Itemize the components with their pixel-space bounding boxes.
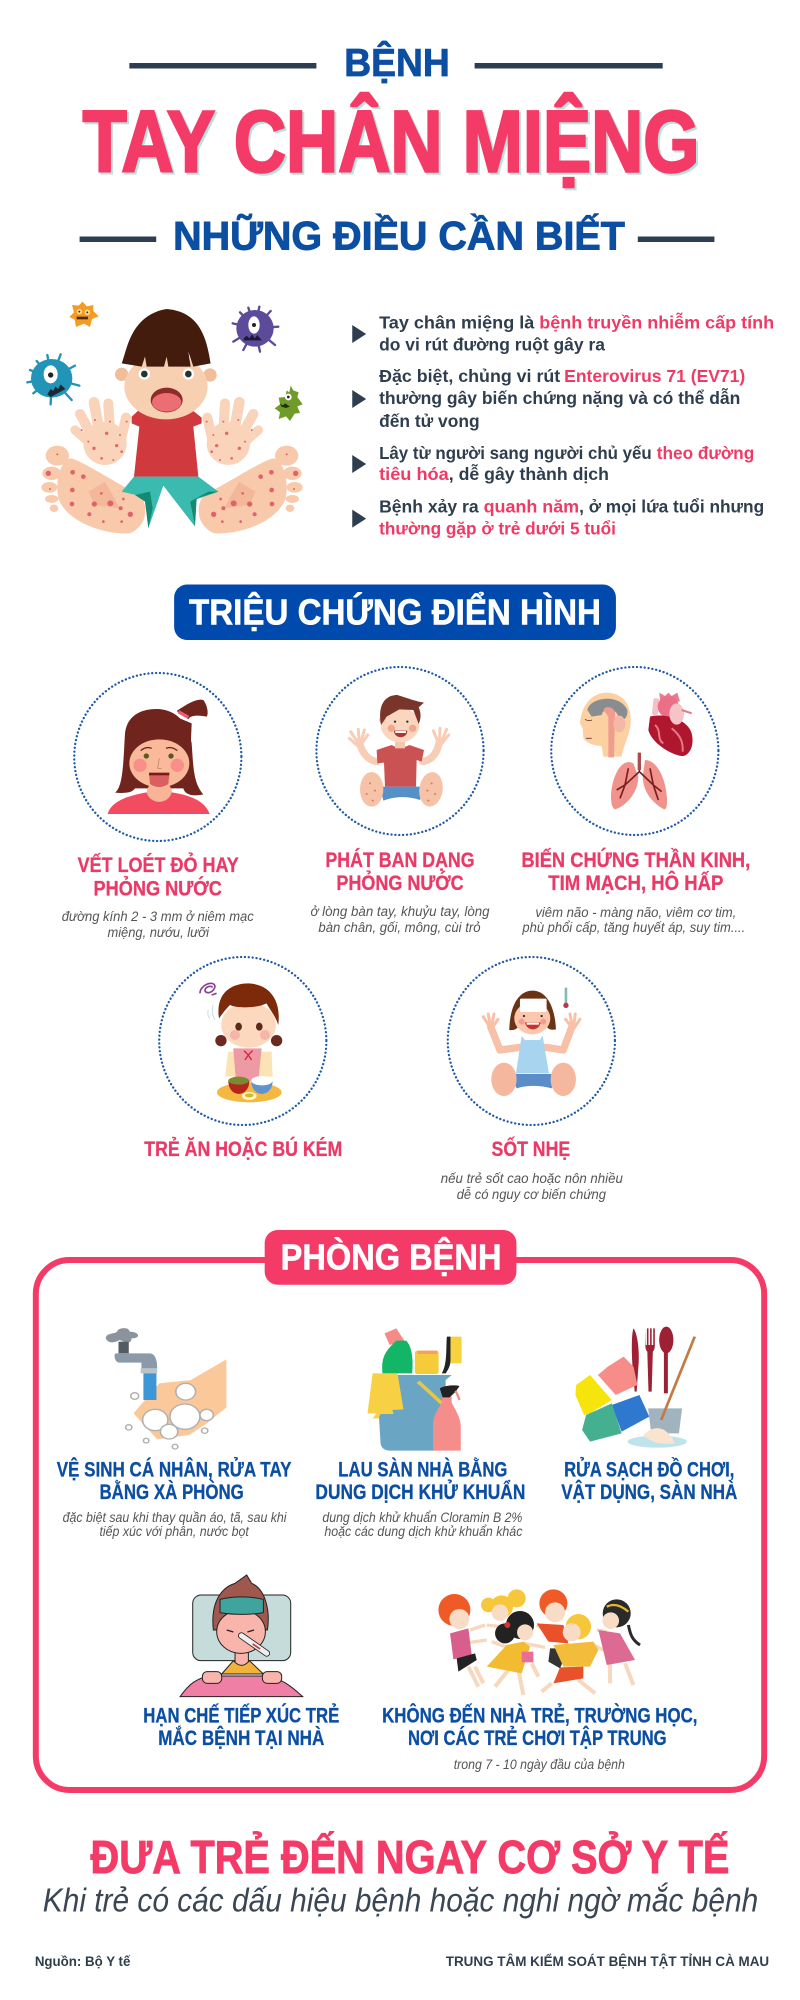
bullet 1 — [352, 312, 774, 355]
heading: BỆNH — [129, 41, 663, 85]
symptom note: nếu trẻ sốt cao hoặc nôn nhiều — [441, 1170, 623, 1186]
item title: KHÔNG ĐẾN NHÀ TRẺ, TRƯỜNG HỌC, — [382, 1703, 698, 1728]
symptom title: TIM MẠCH, HÔ HẤP — [548, 871, 723, 895]
publisher: TRUNG TÂM KIỂM SOÁT BỆNH TẬT TỈNH CÀ MAU — [446, 1952, 769, 1969]
symptom note: viêm não - màng não, viêm cơ tim, — [535, 904, 736, 920]
dotted circle — [159, 957, 326, 1125]
subtitle: NHỮNG ĐIỀU CẦN BIẾT — [80, 212, 714, 259]
icon: blue virus — [27, 354, 79, 404]
heading: BỆNH: BỆNH — [344, 41, 450, 85]
item title: NƠI CÁC TRẺ CHƠI TẬP TRUNG — [408, 1726, 667, 1750]
bullet 2: Enterovirus 71 (EV71) — [564, 366, 745, 386]
icon: orange virus — [69, 302, 99, 327]
bullet 4: quanh năm — [484, 496, 579, 517]
symptom note — [310, 903, 490, 935]
dotted circle — [74, 673, 241, 841]
item: avoid crowded child spaces — [382, 1589, 698, 1772]
bullet 3: tiêu hóa — [379, 464, 450, 484]
symptom: poor appetite — [144, 957, 342, 1161]
item title: MẮC BỆNH TẠI NHÀ — [158, 1726, 324, 1750]
item title: HẠN CHẾ TIẾP XÚC TRẺ — [143, 1703, 339, 1728]
item title: BẰNG XÀ PHÒNG — [100, 1480, 244, 1504]
item title — [561, 1458, 737, 1504]
icon: faucet and soapy hands — [106, 1328, 226, 1449]
icon: girl with food — [200, 983, 282, 1102]
shorts — [122, 477, 218, 528]
item note: trong 7 - 10 ngày đầu của bệnh — [454, 1756, 625, 1772]
item title: DUNG DỊCH KHỬ KHUẨN — [315, 1480, 525, 1504]
illustration: sick child with viruses — [27, 302, 303, 533]
symptom title: PHỎNG NƯỚC — [336, 871, 464, 895]
symptom title — [521, 848, 750, 895]
symptom: complications — [521, 667, 750, 935]
bullet 2: đến tử vong — [379, 411, 480, 431]
heading: PHÒNG BỆNH: PHÒNG BỆNH — [281, 1237, 501, 1278]
item: hand washing — [57, 1328, 292, 1539]
bullet 2 — [352, 366, 745, 431]
symptom title: SỐT NHẸ — [492, 1137, 570, 1161]
icon: heart — [648, 693, 693, 756]
bullet 4: , ở mọi lứa tuổi nhưng — [579, 496, 764, 517]
item note: dung dịch khử khuẩn Cloramin B 2% — [322, 1509, 522, 1525]
bullet 4: thường gặp ở trẻ dưới 5 tuổi — [379, 519, 616, 539]
item title: RỬA SẠCH ĐỒ CHƠI, — [564, 1458, 734, 1482]
feet with rash — [41, 446, 303, 533]
item title: VỆ SINH CÁ NHÂN, RỬA TAY — [57, 1458, 292, 1482]
symptom note — [441, 1170, 623, 1202]
item: cleaning toys and floors — [561, 1327, 737, 1504]
dotted circle — [316, 667, 484, 835]
symptom title — [78, 853, 239, 900]
symptom title — [325, 849, 475, 895]
item title: LAU SÀN NHÀ BẰNG — [338, 1458, 507, 1482]
icon: sick child in bed — [180, 1575, 303, 1697]
item title — [315, 1458, 525, 1504]
item title — [143, 1703, 339, 1750]
item title — [57, 1458, 292, 1504]
bullet 3: , dễ gây thành dịch — [449, 463, 609, 484]
icon: head and brain — [580, 693, 631, 757]
item note: tiếp xúc với phân, nước bọt — [100, 1523, 250, 1539]
hands with rash — [75, 402, 258, 462]
symptom note: bàn chân, gối, mông, cùi trỏ — [318, 919, 481, 935]
source: Nguồn: Bộ Y tế — [35, 1953, 131, 1969]
symptom title: PHÁT BAN DẠNG — [325, 849, 475, 872]
bullet 4: Bệnh xảy ra — [379, 496, 480, 517]
icon: child with fever — [483, 987, 580, 1096]
symptom note — [521, 904, 745, 935]
item note — [63, 1509, 287, 1539]
symptom: blister rash — [310, 667, 490, 935]
heading: PHÒNG BỆNH — [265, 1230, 516, 1285]
bullet 1: Tay chân miệng là — [379, 313, 535, 333]
list: disease facts — [352, 312, 774, 539]
symptom note: ở lòng bàn tay, khuỷu tay, lòng — [310, 903, 490, 919]
panel frame — [36, 1260, 764, 1790]
title: TAY CHÂN MIỆNG: TAY CHÂN MIỆNG — [83, 93, 700, 191]
bullet 2: thường gây biến chứng nặng và có thể dẫn — [379, 387, 740, 408]
icon: girl with ulcer — [108, 700, 210, 814]
item title — [382, 1703, 698, 1750]
bullet 4 — [352, 496, 764, 539]
symptom: mild fever — [441, 957, 623, 1202]
item note: hoặc các dung dịch khử khuẩn khác — [324, 1523, 522, 1539]
item note: đặc biệt sau khi thay quần áo, tã, sau khi — [63, 1509, 287, 1525]
icon: children playing in a circle — [438, 1589, 640, 1695]
bullet 2: Đặc biệt, chủng vi rút — [379, 366, 560, 386]
symptom title: VẾT LOÉT ĐỎ HAY — [78, 853, 239, 877]
head — [115, 309, 217, 419]
icon: purple virus — [233, 307, 278, 352]
symptom note: đường kính 2 - 3 mm ở niêm mạc — [62, 908, 254, 924]
subtitle: NHỮNG ĐIỀU CẦN BIẾT: NHỮNG ĐIỀU CẦN BIẾT — [173, 212, 625, 259]
icon: bucket and cleaning supplies — [367, 1328, 462, 1451]
icons: head, heart and lungs — [580, 693, 693, 809]
item note — [322, 1509, 522, 1539]
panel: prevention — [36, 1230, 764, 1790]
bullet 3: Lây từ người sang người chủ yếu — [379, 443, 652, 463]
icon: boy with rash — [349, 695, 449, 808]
symptom note: miệng, nướu, lưỡi — [107, 924, 210, 940]
icon: lungs — [611, 753, 667, 809]
symptom title: BIẾN CHỨNG THẦN KINH, — [521, 848, 750, 872]
bullet 3 — [352, 443, 754, 484]
dotted circle — [448, 957, 615, 1125]
symptom title: TRẺ ĂN HOẶC BÚ KÉM — [144, 1137, 342, 1161]
symptom: mouth ulcers — [62, 673, 254, 940]
bullet 1: bệnh truyền nhiễm cấp tính — [539, 312, 774, 333]
shirt — [132, 408, 202, 477]
item: floor disinfecting — [315, 1328, 525, 1539]
bullet 1: do vi rút đường ruột gây ra — [379, 335, 606, 355]
symptom note: dễ có nguy cơ biến chứng — [457, 1186, 606, 1202]
icon: green virus — [275, 386, 303, 421]
heading: TRIỆU CHỨNG ĐIỂN HÌNH: TRIỆU CHỨNG ĐIỂN HÌNH — [189, 591, 601, 633]
symptom note: phù phổi cấp, tăng huyết áp, suy tim.... — [521, 919, 745, 935]
symptom note — [62, 908, 254, 940]
heading: TRIỆU CHỨNG ĐIỂN HÌNH — [174, 584, 616, 640]
item title: VẬT DỤNG, SÀN NHÀ — [561, 1480, 737, 1504]
bullet 3: theo đường — [657, 443, 754, 463]
symptom title: PHỎNG NƯỚC — [94, 876, 222, 900]
dotted circle — [551, 667, 718, 835]
item: limit contact — [143, 1575, 339, 1750]
icon: puzzle, utensils, mop — [575, 1327, 695, 1448]
